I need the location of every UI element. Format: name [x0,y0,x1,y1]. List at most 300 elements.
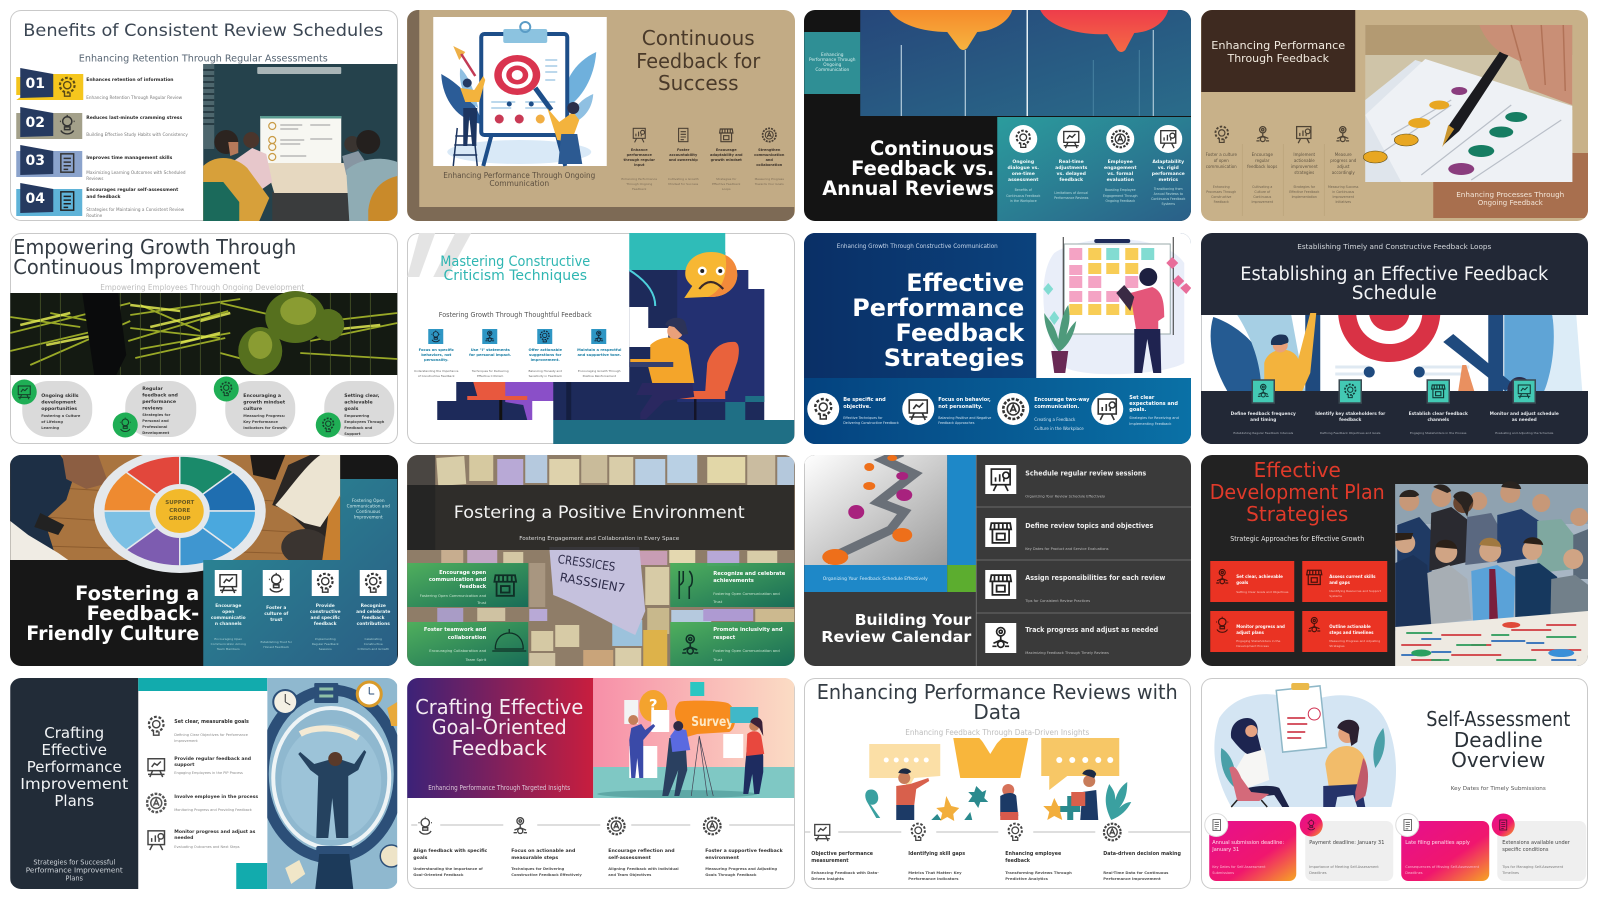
technique columns: Offer actionable [529,348,562,352]
title: Building Your [854,611,971,629]
feature columns: Encouraging Open [214,637,242,641]
columns of text: Constructive Feedback Effectively [511,872,582,876]
title: Performance [852,294,1024,322]
feature panel: metrics [1158,177,1178,183]
red card: assess skills [1302,561,1387,602]
feature columns: Continuous [1253,195,1271,199]
feature blob 3 [214,376,295,436]
feature columns: Constructive [364,642,383,646]
feature columns: Feedback [1213,200,1228,204]
illustration: person at sticky-note board [1036,232,1191,378]
columns of text: Transforming Reviews Through [1005,870,1072,874]
icon and connector row [804,823,1191,841]
title: Overview [1451,748,1545,772]
technique columns: behaviors, not [421,352,452,356]
strategy items: objective. [843,404,871,410]
feature columns: input [634,163,645,167]
deadline card 2: Importance of Meeting Self-Assessment [1309,864,1379,868]
technique columns: Sensitivity in Feedback [529,374,562,378]
sub-heading: Establishing Timely and Constructive Feedback Loops [1297,242,1491,250]
teal panel: Communication and [347,504,390,510]
deadline card 4: specific conditions [1502,846,1548,852]
frame strips [407,10,794,221]
feature columns: communication [1205,164,1237,169]
columns of text: Understanding the Importance of [413,866,483,870]
panel: Crafting Effective Performance Improvement Plans [10,678,398,888]
red card: outline steps: Measuring Progress and Adjusting [1329,639,1380,643]
feature columns: Strategies for [716,177,737,181]
teal tag: Ongoing [823,62,841,68]
panel: Continuous Feedback for Success: Communication [489,179,549,188]
feature columns: Criticism and Growth [357,647,389,651]
backdrop with speech bubbles [860,10,1191,116]
feature columns: actionable [1293,158,1315,163]
list item 01 [16,68,183,100]
strategy items: Set clear [1129,394,1154,400]
panel: Mastering Constructive Criticism Techniques [407,232,794,444]
feature columns: Implementation [1291,195,1316,199]
deadline card 4: Tips for Managing Self-Assessment [1501,864,1563,868]
deadline card 4 [1491,813,1586,880]
feature panel: evaluation [1106,177,1133,183]
green box: recognize: Fostering Open Communication and [713,592,780,596]
feature columns: trust [270,617,282,623]
photo: support wheel on floor: GROUP [169,516,191,522]
technique columns: Techniques for Delivering [471,368,509,372]
list item 03: Maximizing Learning Outcomes with Scheduled [86,170,186,175]
feature columns: Cultivating a [1252,185,1272,189]
feature columns: collaboration [756,163,783,167]
caption: Enhancing Performance Through Ongoing [443,171,595,180]
row: assign responsibilities: Tips for Consistent Review Practices [1024,599,1090,603]
feature columns: Culture of [1254,190,1270,194]
feature blob 4: Employees Through [344,420,385,424]
title block: Feedback [452,736,547,760]
strategy items: Implementing Feedback [1129,422,1172,426]
title: Fostering a [75,582,199,605]
red card: assess skills: Systems [1329,594,1342,598]
feature columns [621,128,785,191]
item: set goals: Set clear, measurable goals [174,718,249,724]
feature panel: Benefits of [1014,188,1032,192]
title [821,611,971,646]
deadline card 2 [1299,813,1393,880]
teal accents [138,678,267,888]
feature columns: Establishing Trust for [261,640,293,644]
list item 02: 02 [26,115,45,131]
title: Deadline [1453,728,1542,752]
feature blob 2: Development [142,430,169,434]
subtitle: Enhancing Retention Through Regular Assessments [79,54,328,64]
item: set goals: Defining Clear Objectives for Performance [174,732,248,736]
columns of text: Performance Improvement [1103,876,1160,880]
dark title column: Plans [66,874,84,882]
illustration: team with speech bubbles [865,738,1131,820]
subtitle: Fostering Engagement and Collaboration in Every Space [519,536,680,542]
feature columns: of open [1213,158,1229,163]
row: define topics: Define review topics and objectives [1025,522,1153,530]
title: Strategies [883,344,1024,372]
subtitle: Fostering Growth Through Thoughtful Feedback [439,310,592,318]
red card: monitor progress: Development Process [1236,644,1269,648]
panel: Benefits of Consistent Review Schedules [10,10,398,221]
strategy items: communication. [1034,404,1079,410]
strategy items [807,392,1178,430]
deadline card 3: Consequences of Missing Self-Assessment [1405,864,1479,868]
deadline card 1: Submissions [1212,870,1234,874]
technique columns: Positive Reinforcement [583,374,617,378]
feature columns: Provide [316,603,335,609]
photo: glowing network and trees [10,290,397,374]
strategy items: Delivering Constructive Feedback [843,420,898,424]
title block: Enhancing Performance Through Targeted Insights [428,784,571,792]
title: Development Plan [1209,480,1384,504]
red card: set goals: Set clear, achievable [1236,574,1283,579]
feature blob 1: opportunities [41,406,77,412]
feature columns: feedback [362,615,385,621]
title: Feedback- [87,602,199,625]
columns of text: Data-driven decision making [1103,850,1181,856]
columns of text: Metrics That Matter: Key [908,870,962,874]
red card: outline steps: Strategies [1329,644,1345,648]
columns of text: Encourage reflection and [608,848,675,854]
feature blob 1: of Lifelong [41,420,63,424]
dark title column: Performance Improvement [26,866,123,874]
schedule columns: feedback [1339,416,1361,422]
feature columns: Implement [1293,152,1315,157]
technique columns: Maintain a respectful [577,348,621,352]
technique columns: Effective Criticism [477,374,504,378]
illustration: person at desk [437,232,764,428]
green box: recognize: Trust [712,600,723,604]
feature panel: Adaptability [1152,159,1184,165]
list item 04: 04 [26,191,45,207]
columns of text: environment [705,854,740,860]
row: schedule sessions: Organizing Your Review Schedule Effectively [1025,494,1105,498]
red card: monitor progress: Monitor progress and [1236,624,1285,629]
list item 01: Enhancing Retention Through Regular Review [86,95,183,100]
green box: inclusivity: Trust [712,658,723,662]
feature blob 4: goals [344,406,359,412]
title block: Enhancing Performance [1211,39,1345,52]
deadline card 1: Key Dates for Self-Assessment [1212,864,1266,868]
terracotta block: Ongoing Feedback [1477,199,1543,207]
feature columns: Communication Among [211,642,246,646]
panel: Enhancing Performance Through Feedback [1200,10,1588,221]
feature columns: feedback [314,621,337,627]
feature panel: one-time [1011,171,1034,177]
list item 01: 01 [26,76,45,92]
feature blob 3: Measuring Progress: [243,414,286,418]
green box: teamwork: Foster teamwork and [424,627,487,633]
red card: monitor progress [1210,611,1294,652]
feature blob 2 [113,380,196,437]
schedule columns: Establish clear feedback [1408,410,1467,416]
feature columns: Improvement [1251,200,1273,204]
feature columns: Improvement [1332,195,1354,199]
terracotta block [1433,153,1588,218]
feature panel: Continuous Feedback [1151,197,1185,201]
title [440,254,590,284]
red card: monitor progress: Engaging Stakeholders in the [1236,639,1280,643]
feature columns: Recognize [361,603,386,609]
title block: Goal-Oriented [432,714,567,738]
feature blob 3: culture [243,406,262,412]
red card: assess skills: Assess current skills [1329,574,1376,579]
feature columns: n channels [215,621,242,627]
list item 03: Reviews [86,176,103,181]
feature columns: contributions [357,621,390,627]
columns of text: Goals Through Feedback [705,872,757,876]
title [852,268,1025,372]
title: Benefits of Consistent Review Schedules [23,20,383,40]
icon and connector row [411,816,794,834]
item: monitor progress: needed [174,834,193,840]
list item 02: Reduces last-minute cramming stress [86,115,182,121]
green box: recognize: achievements [713,578,754,584]
feature panel: in the Workplace [1009,199,1036,203]
list item 03 [16,145,186,181]
list item 02: Building Effective Study Habits with Consistency [86,132,188,137]
feature panel: dialogue vs. [1007,165,1039,171]
feature columns: Through Ongoing [625,182,652,186]
feature blob 2: Professional [142,424,167,428]
title: Schedule [1351,282,1436,304]
feature columns [1205,127,1358,216]
feature columns: Celebrating [365,637,382,641]
technique columns: Balancing Honesty and [529,368,562,372]
feature columns: Processes Through [1206,190,1236,194]
title: Friendly Culture [26,622,199,645]
teal tag: Communication [815,67,849,73]
green box: recognize: Recognize and celebrate [713,571,786,577]
technique columns: for personal impact. [469,352,512,356]
strategy items: expectations and [1129,400,1178,406]
title: Annual Reviews [822,177,994,200]
feature columns: and ownership [669,158,698,162]
illustration: conductor in ring of clocks [263,678,402,888]
feature columns: Towards Your Goals [754,182,784,186]
columns of text: Enhancing Feedback with Data- [811,870,879,874]
photo: sticky note wall: RASSSIEN7 [559,570,626,595]
title [1426,706,1570,772]
feature columns: progress and [1330,158,1356,163]
green box: recognize [670,563,794,607]
feature blob 4 [316,380,394,437]
feature columns: Cultivating a Growth [668,177,699,181]
columns of text: Measuring Progress and Adjusting [705,866,777,870]
columns of text: Aligning Feedback with Individual [608,866,679,870]
feature panel: vs. formal [1107,171,1133,177]
feature panel: Ongoing [1012,159,1034,165]
feature panel: Limitations of Annual [1054,191,1088,195]
feature panel: Systems [1161,202,1175,206]
feature panel: vs. rigid [1157,165,1178,171]
feature columns: Effective Feedback [712,182,741,186]
teal panel: Continuous [356,509,381,515]
feature columns: Encourage [215,603,241,609]
technique columns: personality. [424,358,449,362]
feature blob 2: Personal and [142,418,169,422]
green box: teamwork: collaboration [448,635,487,641]
red card: assess skills: Identifying Resources and Support [1329,589,1381,593]
strategy items: Strategies for Receiving and [1129,416,1178,420]
feature panel: adjustments [1055,165,1087,171]
panel: Building Your Review Calendar [804,455,1191,666]
columns of text: Real-Time Data for Continuous [1103,870,1169,874]
strategy items: not personality. [938,404,982,410]
list item 04: Routine [86,213,103,218]
technique columns [414,328,622,378]
panel: Effective Development Plan Strategies [1200,455,1588,666]
deadline card 1: Annual submission deadline: [1212,840,1284,846]
row: track progress [985,623,1158,655]
columns of text: Foster a supportive feedback [705,848,784,854]
panel: Fostering a Feedback-Friendly Culture [10,455,398,666]
item: set goals: Improvement [174,738,198,742]
red card: set goals: Setting Clear Goals and Objectives [1236,590,1288,594]
feature blob 4: Empowering [344,414,370,418]
list item 04: and feedback [86,194,121,200]
feature panel: Continuous Feedback [1006,194,1040,198]
title [822,137,994,200]
feature columns: and [766,158,773,162]
columns of text: Objective performance [811,850,873,856]
columns of text: Techniques for Delivering [511,866,565,870]
schedule columns: Monitor and adjust schedule [1489,410,1558,416]
deadline card 2: Payment deadline: January 31 [1309,840,1384,846]
feature columns: Team Members [216,647,240,651]
item: monitor progress: Evaluating Outcomes and Next Steps [174,844,240,848]
illustration band [1201,312,1588,390]
title: Empowering Growth Through [13,234,296,258]
teal panel: Fostering Open [352,498,385,504]
feature panel: Ongoing Feedback [1105,199,1135,203]
feature columns: communication [754,153,785,157]
deadline card 1 [1204,813,1296,880]
red card: outline steps [1302,611,1387,652]
item: provide feedback: Provide regular feedback and [174,756,251,762]
illustration: two people reviewing a form [1214,682,1396,806]
columns of text: Align feedback with specific [413,848,488,854]
list item 04: Encourages regular self-assessment [86,187,179,193]
technique columns: and supportive tone. [577,352,622,356]
quote mark decoration [407,232,471,276]
subtitle: Enhancing Feedback Through Data-Driven Insights [905,728,1089,736]
teal tag [804,32,860,94]
item: involve employee: Monitoring Progress and Providing Feedback [174,808,253,812]
illustration: survey discussion [593,678,794,798]
green box: open communication: Trust [476,601,487,605]
panel: Establishing an Effective Feedback Schedule [1200,232,1588,444]
panel: Continuous Feedback vs. Annual Reviews [804,10,1191,221]
panel: Self-Assessment Deadline Overview [1200,678,1588,888]
feature blob 2: reviews [142,405,163,411]
feature columns [211,570,390,651]
feature panel: Engagement Through [1102,194,1137,198]
columns of text: feedback [1005,858,1030,864]
title [1240,264,1548,304]
schedule columns: Evaluating and Adjusting the Schedule [1495,430,1553,434]
technique columns: suggestions for [529,352,562,356]
columns of text: Predictive Analytics [1005,876,1048,880]
subtitle: Key Dates for Timely Submissions [1450,786,1545,792]
feature panel: Performance Reviews [1054,196,1088,200]
title: Enhancing Performance Reviews with [816,680,1177,704]
green box: teamwork: Team Spirit [465,658,487,662]
dark title column: Crafting [44,724,104,742]
dark title column: Improvement [20,774,128,792]
title [1209,458,1384,526]
title block: Crafting Effective [415,694,583,718]
schedule columns: and timing [1250,416,1276,422]
strategy items: Balancing Positive and Negative [938,416,991,420]
columns of text: measurable steps [511,854,558,860]
red card: monitor progress: adjust plans [1236,630,1264,635]
title: Self-Assessment [1426,706,1570,730]
feature columns: performance [627,153,652,157]
footer strip [804,378,1191,444]
feature columns: Foster a [266,605,286,611]
feature columns: Enhancing [1212,185,1229,189]
strategy items: Effective Techniques for [843,416,883,420]
columns of text: Goal-Oriented Feedback [413,872,464,876]
title: Criticism Techniques [443,268,587,284]
row: assign responsibilities [985,570,1165,603]
feature columns: Enhance [631,148,648,152]
schedule columns: Define feedback frequency [1230,410,1296,416]
feature columns: adjust [1337,164,1349,169]
red card: outline steps: Outline actionable [1329,624,1370,629]
teal tag: Performance Through [809,57,855,63]
photo: support wheel on floor: CRORE [169,508,190,514]
strategy items: Be specific and [843,396,886,402]
item: provide feedback [148,756,251,777]
title: Success [658,71,739,95]
feature columns: Measuring Progress [755,177,784,181]
deadline card 1: January 31 [1211,846,1239,852]
feature columns: Feedback [632,187,647,191]
schedule columns: Engaging Stakeholders in the Process [1410,430,1466,434]
feature columns: Honest Feedback [263,645,289,649]
green box: open communication: Fostering Open Communication and [420,594,486,598]
feature blob 2: Regular [142,386,164,392]
green box: inclusivity: Fostering Open Communication and [713,649,780,653]
technique columns: of Constructive Feedback [418,374,455,378]
strategy items: goals. [1129,406,1146,412]
feature columns: Constructive [1211,195,1231,199]
title [13,234,296,278]
schedule columns: as needed [1511,416,1536,422]
green box: open communication: communication and [429,577,487,583]
feature blob 1: Ongoing skills [41,392,79,398]
colour tab: Organizing Your Feedback Schedule Effectively [822,576,928,582]
list item 03: 03 [26,153,45,169]
green box: open communication: feedback [460,584,487,590]
item: monitor progress: Monitor progress and adjust as [174,828,256,834]
feature panel: Transitioning from [1152,187,1182,191]
list item 01: Enhances retention of information [86,77,174,83]
title: Feedback vs. [851,157,994,180]
columns of text: self-assessment [608,854,652,860]
feature blob 1: Learning [41,426,60,430]
item: monitor progress [148,828,256,850]
dividers [976,455,1191,666]
green box: teamwork: Encouraging Collaboration and [429,649,486,653]
dark title column: Strategies for Successful [33,858,115,866]
list item 03: Improves time management skills [86,155,173,161]
dark title column: Plans [54,792,94,810]
